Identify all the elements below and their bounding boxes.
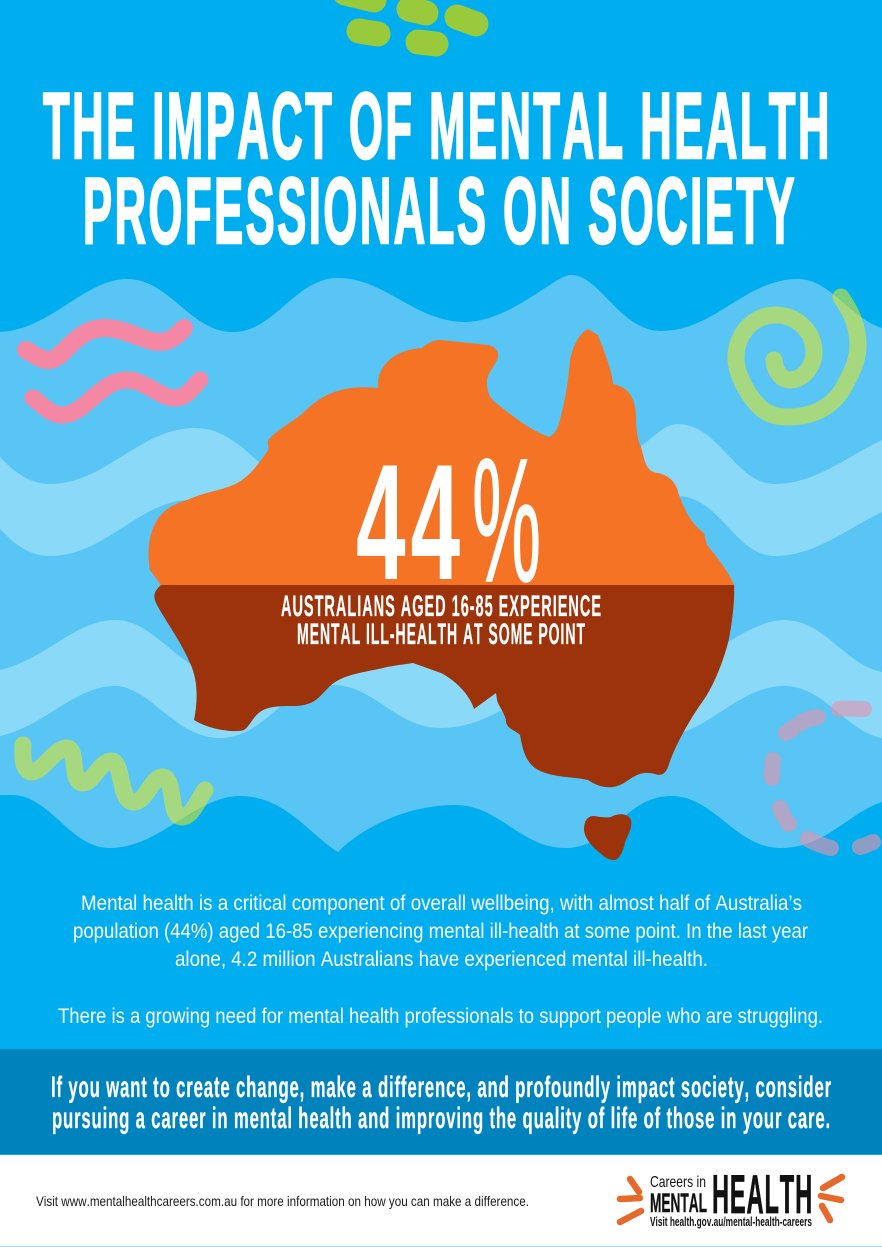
map: southern brown section — [154, 585, 734, 787]
logo wordmark — [650, 1163, 813, 1229]
map: Tasmania — [584, 814, 631, 860]
body text: Mental health is a critical component of overall wellbeing, with almost half of Australia’s — [81, 891, 802, 915]
title — [43, 73, 832, 263]
icon: orange rays — [620, 1177, 842, 1222]
footer panel — [0, 1155, 882, 1246]
callout text — [51, 1071, 832, 1135]
map: northern orange section — [148, 329, 734, 585]
body text: alone, 4.2 million Australians have experienced mental ill-health. — [175, 947, 708, 971]
medium blue wave band — [0, 275, 882, 852]
callout band — [0, 1049, 882, 1154]
light blue wave band, upper — [0, 424, 882, 556]
logo wordmark: Careers in — [650, 1174, 706, 1191]
green wavy line — [23, 745, 205, 817]
body text — [58, 891, 823, 1028]
logo: Careers in Mental Health — [620, 1163, 842, 1229]
footer text: Visit www.mentalhealthcareers.com.au for more information on how you can make a difference. — [36, 1193, 529, 1209]
green spiral — [736, 297, 858, 417]
pink squiggles — [26, 328, 200, 415]
purple dashed circle — [772, 709, 873, 848]
text: % — [472, 423, 541, 619]
light blue wave band, lower — [0, 620, 882, 738]
statistic caption — [281, 590, 602, 651]
map of Australia — [148, 329, 734, 860]
footer bottom line — [0, 1246, 882, 1247]
big statistic 44%: 44 — [356, 430, 465, 614]
logo wordmark: MENTAL — [650, 1188, 707, 1218]
decorative green pills — [345, 0, 476, 44]
